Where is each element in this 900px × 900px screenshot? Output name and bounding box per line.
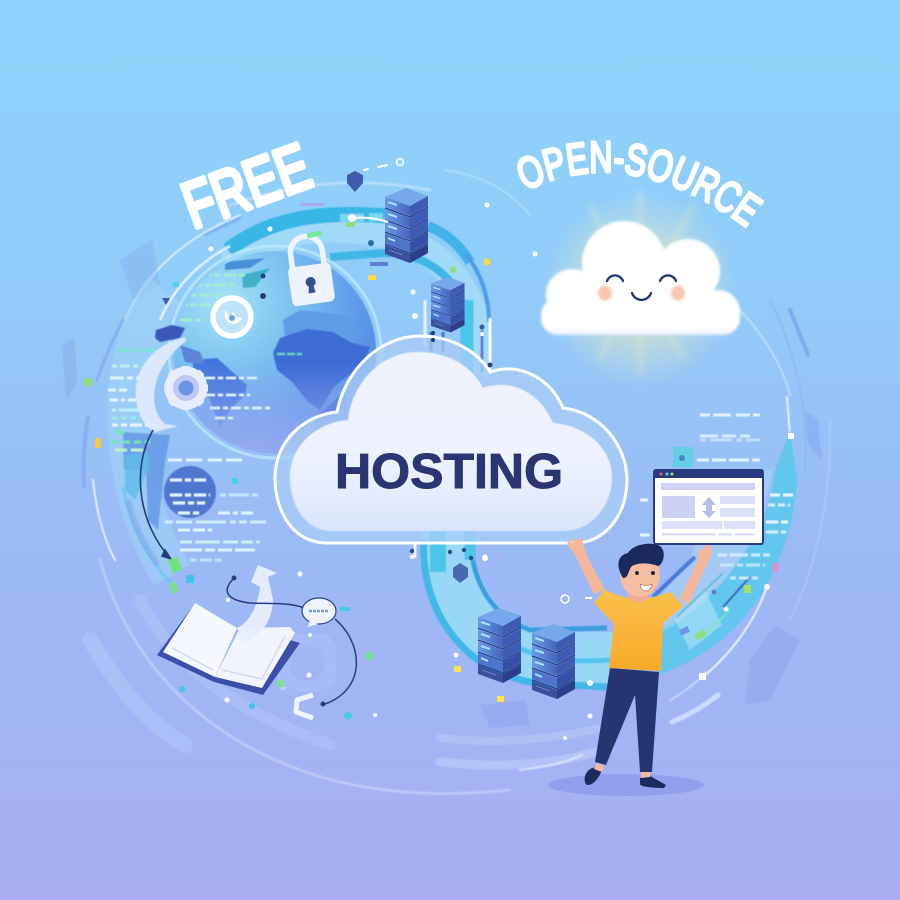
server stack: second: [431, 277, 465, 332]
code streams left: [108, 350, 268, 560]
cheeks: [598, 286, 685, 300]
smiling cloud: [541, 221, 740, 335]
neck: [628, 585, 648, 602]
heading: hosting: HOSTING: [335, 444, 563, 499]
cloud body: [290, 352, 612, 531]
ground shadow: [548, 774, 704, 796]
globe: [169, 246, 381, 458]
icon: shield top: [347, 171, 363, 192]
swoosh arrow: [136, 337, 186, 432]
icon: gear: [164, 366, 208, 410]
continents: [174, 251, 376, 453]
cloud outline: [275, 336, 627, 543]
globe ring: [169, 246, 381, 458]
server stack: top: [385, 188, 428, 263]
teal data band: lower: [415, 530, 615, 687]
faint slab shapes: [120, 240, 160, 300]
path for open-source label: [525, 172, 746, 227]
person: [548, 537, 712, 796]
hair: [618, 544, 664, 578]
faint gear behind book: [281, 637, 333, 689]
small glowing dots and data chips: [84, 202, 794, 740]
cable pins below main cloud: [410, 548, 488, 560]
face: [620, 553, 660, 597]
shoes: [585, 768, 666, 788]
decorative swirl rings and data bands: [62, 170, 830, 793]
connector dashes near shield: [364, 158, 404, 170]
server stack: lower right: [532, 624, 575, 699]
icon: white ring badge: [213, 298, 251, 336]
teal data band: upper: [160, 214, 490, 392]
icon: padlock: [283, 233, 335, 307]
code streams right: [640, 415, 795, 578]
left light band and cyan slabs: [123, 290, 172, 582]
eyes and smile: [635, 571, 655, 591]
label: open-source: OPEN-SOURCE: [517, 140, 764, 228]
connector from band to top server: [349, 215, 388, 222]
sun glow: [542, 190, 738, 388]
pins above main cloud: [431, 324, 492, 368]
outer orbit arcs: [84, 170, 830, 793]
teal data crescent: right: [655, 430, 797, 676]
title bar: [654, 470, 763, 478]
icon: code orb: [164, 466, 216, 518]
label: free: FREE: [173, 129, 320, 242]
arrow rising from book: [237, 565, 277, 643]
dark arrow curve: [140, 430, 171, 559]
book icon: [157, 565, 300, 695]
arms: [567, 537, 605, 594]
browser window: [654, 470, 763, 544]
navy landmass outside globe: [155, 325, 185, 342]
speech bubble with curved connectors: [227, 576, 356, 706]
face: [607, 275, 676, 300]
pants: [595, 668, 659, 772]
page content blocks: [661, 483, 755, 536]
main cloud: [275, 336, 627, 543]
bracket glyph shape: [296, 695, 313, 718]
socks: [594, 763, 650, 778]
t-shirt: [594, 590, 683, 671]
window dots: [660, 472, 674, 476]
server stack: lower left: [478, 608, 521, 683]
